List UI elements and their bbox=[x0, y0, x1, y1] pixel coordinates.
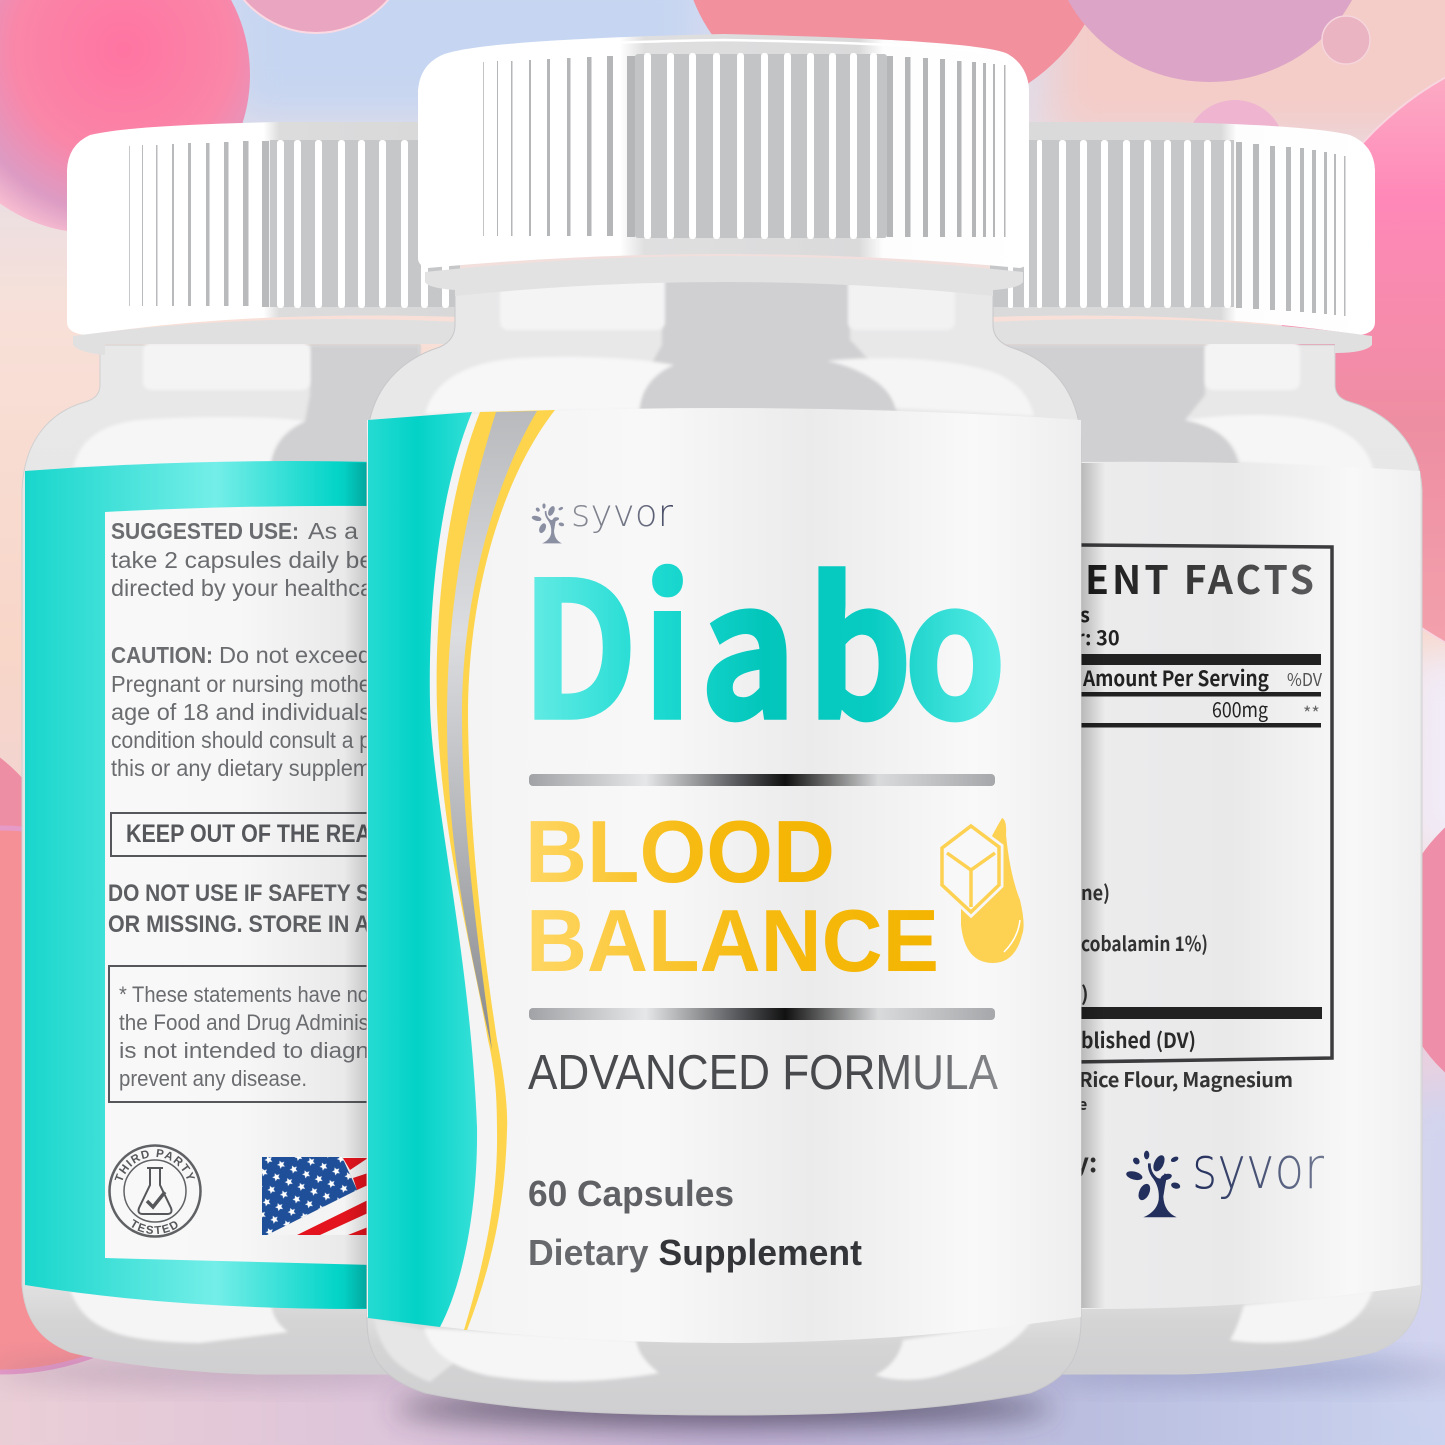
front bottle bbox=[367, 34, 1081, 1415]
cast shadow on right bottle bbox=[1081, 463, 1105, 1308]
shoulder highlight bbox=[73, 417, 305, 468]
product name: Diabo bbox=[521, 500, 1006, 772]
ingredient fragments: cobalamin 1%) bbox=[1081, 928, 1208, 957]
bottle cap bbox=[67, 122, 460, 355]
neck highlights bbox=[500, 273, 955, 330]
cap collar bbox=[73, 319, 460, 355]
other ingredients bbox=[1082, 1071, 1292, 1110]
third party tested seal: THIRD PARTY bbox=[114, 1149, 196, 1180]
suggested use: take 2 capsules daily be bbox=[111, 547, 373, 573]
keep out of reach box: KEEP OUT OF THE REA bbox=[126, 820, 371, 848]
caution: Pregnant or nursing mothe bbox=[111, 671, 371, 697]
suggested use: As a bbox=[308, 518, 358, 544]
teal wave bbox=[368, 412, 477, 1327]
other ingredients: e bbox=[1078, 1091, 1087, 1115]
bottle body bbox=[1000, 345, 1422, 1374]
caution: this or any dietary supplem bbox=[111, 755, 371, 781]
FDA disclaimer box: the Food and Drug Adminis bbox=[119, 1010, 369, 1035]
neck and shoulder shade bbox=[639, 275, 897, 412]
safety warning: OR MISSING. STORE IN A bbox=[108, 911, 370, 938]
blood balance heading: BALANCE bbox=[526, 891, 939, 990]
icon: tree bbox=[1125, 1151, 1181, 1217]
blood balance heading bbox=[525, 802, 939, 990]
safety warning: DO NOT USE IF SAFETY S bbox=[108, 880, 370, 907]
cast shadow on left bottle bbox=[344, 463, 368, 1308]
silver swoosh bbox=[447, 411, 537, 1050]
serving info: r: 30 bbox=[1076, 622, 1120, 651]
serving info: s bbox=[1080, 599, 1090, 628]
wordmark: syvor bbox=[571, 492, 674, 535]
table header: 600mg bbox=[1212, 694, 1268, 723]
daily value note: blished (DV) bbox=[1081, 1025, 1196, 1055]
shoulder highlights bbox=[425, 357, 1034, 416]
shadows under bottles bbox=[0, 1362, 1445, 1426]
back-left bottle bbox=[22, 122, 460, 1374]
table header: Amount Per Serving bbox=[1082, 663, 1269, 693]
cap ribs bbox=[483, 53, 1006, 239]
back-right bottle bbox=[990, 122, 1422, 1374]
caution: CAUTION: bbox=[111, 642, 213, 668]
syvor brand bbox=[531, 492, 674, 543]
bottle cap bbox=[990, 122, 1375, 353]
shoulder highlight bbox=[1185, 415, 1374, 472]
rule bbox=[529, 774, 995, 786]
facts title: ENT FACTS bbox=[1085, 550, 1314, 606]
dietary supplement: Dietary Supplement bbox=[528, 1232, 862, 1273]
caution: condition should consult a p bbox=[111, 727, 371, 753]
ingredient fragments bbox=[1081, 877, 1208, 1007]
keep out of reach box bbox=[111, 813, 381, 856]
table header: %DV bbox=[1287, 666, 1323, 692]
ingredient fragments: ) bbox=[1081, 978, 1089, 1007]
caution: age of 18 and individuals bbox=[111, 699, 371, 725]
table header: ** bbox=[1303, 700, 1320, 726]
bottle body bbox=[367, 280, 1081, 1415]
suggested use: directed by your healthca bbox=[111, 575, 373, 601]
supplement facts box bbox=[1076, 545, 1332, 1062]
rule bbox=[529, 1008, 995, 1020]
neck and shoulder shade bbox=[1000, 345, 1240, 470]
cap collar bbox=[425, 256, 1023, 296]
american flag bbox=[262, 1157, 368, 1235]
other ingredients: Rice Flour, Magnesium bbox=[1079, 1064, 1293, 1093]
cap ribs bbox=[129, 140, 460, 308]
table header bbox=[1076, 654, 1323, 728]
ingredient fragments: ne) bbox=[1081, 877, 1110, 906]
neck highlight bbox=[143, 343, 310, 390]
neck and shoulder shade bbox=[270, 345, 420, 470]
caution: Do not exceed bbox=[219, 642, 371, 668]
supplement facts label bbox=[1074, 462, 1420, 1309]
yellow swoosh bbox=[437, 410, 555, 1330]
bottle body bbox=[22, 345, 420, 1374]
neck highlight bbox=[1205, 342, 1300, 390]
capsule count: 60 Capsules bbox=[528, 1173, 734, 1214]
serving info bbox=[1082, 610, 1119, 646]
FDA disclaimer box: prevent any disease. bbox=[119, 1066, 307, 1091]
blood balance heading: BLOOD bbox=[525, 802, 835, 901]
front label bbox=[367, 408, 1081, 1343]
cap ribs bbox=[990, 140, 1346, 316]
lower highlight bbox=[1230, 1290, 1373, 1343]
suggested use: SUGGESTED USE: bbox=[111, 518, 299, 544]
cap collar bbox=[990, 319, 1372, 353]
distributed by fragment: y: bbox=[1074, 1143, 1097, 1180]
lower highlight bbox=[70, 1290, 288, 1343]
icon: tree bbox=[531, 503, 565, 543]
third party tested seal bbox=[108, 1144, 202, 1238]
wordmark: syvor bbox=[1192, 1134, 1324, 1202]
FDA disclaimer box: * These statements have no bbox=[119, 982, 369, 1007]
caution bbox=[111, 642, 371, 781]
icon: sugar cube and drop bbox=[942, 818, 1024, 963]
FDA disclaimer box: is not intended to diagn bbox=[119, 1038, 369, 1063]
lower highlights bbox=[374, 1318, 1032, 1382]
front cap bbox=[418, 34, 1029, 296]
syvor logo bbox=[1126, 1150, 1324, 1218]
FDA disclaimer box bbox=[109, 966, 384, 1102]
cap top rim bbox=[445, 40, 1004, 60]
third party tested seal: TESTED bbox=[132, 1219, 178, 1234]
back label bbox=[25, 461, 366, 1309]
advanced formula: ADVANCED FORMULA bbox=[528, 1046, 998, 1100]
safety warning bbox=[108, 884, 366, 932]
suggested use bbox=[111, 518, 373, 601]
